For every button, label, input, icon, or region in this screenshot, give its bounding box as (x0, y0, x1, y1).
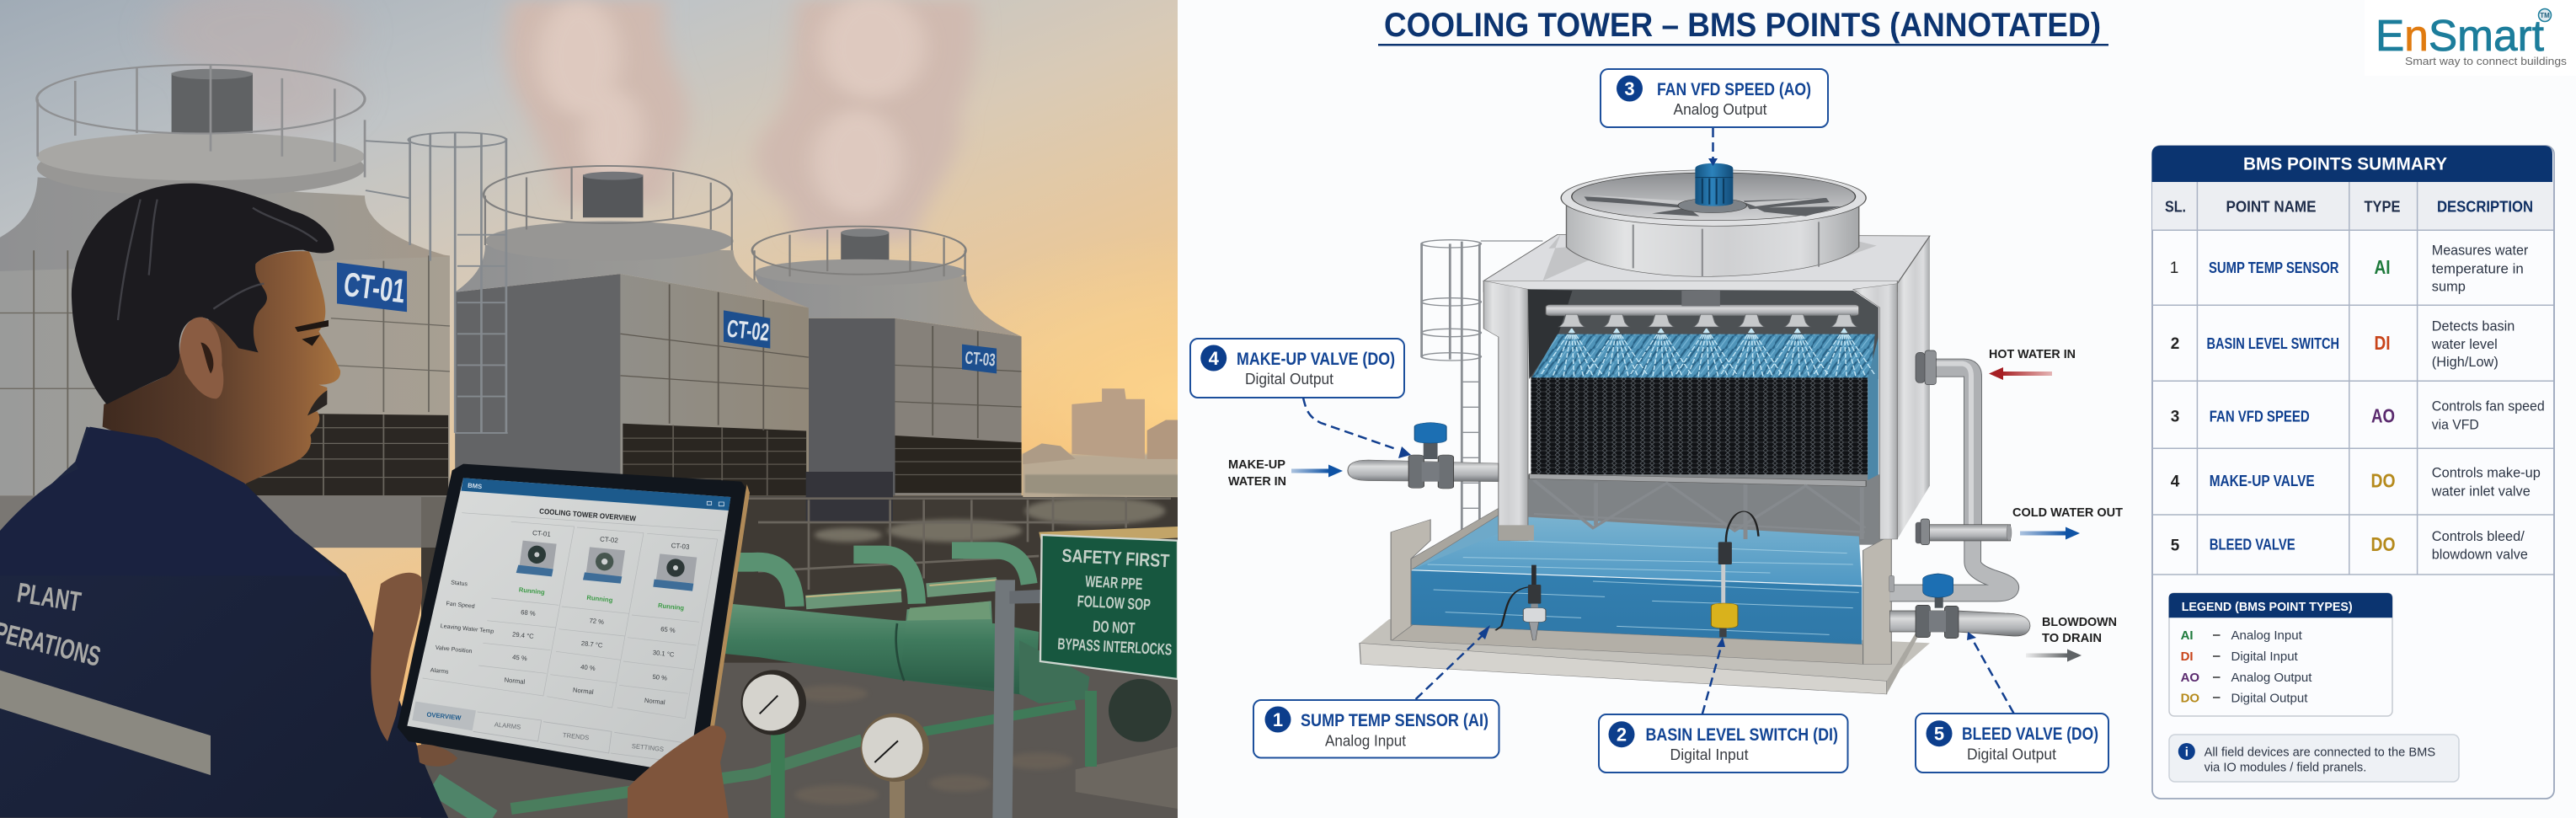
safety sign board (1040, 535, 1178, 679)
legend box: Analog Output (2231, 671, 2312, 685)
table header row: SL. (2165, 197, 2186, 216)
tablet screen content: 30.1 °C (652, 649, 675, 659)
legend box: Digital Input (2231, 650, 2299, 664)
face and neck (103, 251, 340, 484)
callout 3: fan VFD speed: Analog Output (1673, 101, 1767, 118)
tablet screen content (412, 482, 724, 762)
legend box (2169, 593, 2392, 716)
tablet screen content: 28.7 °C (580, 639, 603, 650)
callout 4: make-up valve: 4 (1209, 348, 1220, 369)
water spray header (1541, 291, 1875, 377)
bleed pipe and valve (1889, 574, 2030, 639)
info note (2169, 735, 2459, 782)
callout 1: sump temp sensor: 1 (1273, 709, 1283, 730)
legend box: Digital Output (2231, 691, 2308, 705)
tablet screen content: Alarms (430, 667, 449, 676)
lower return pipe (1889, 541, 2011, 593)
leader: bleed valve (1967, 632, 2013, 714)
table row 5: Controls bleed/ (2432, 529, 2525, 544)
table row 3: FAN VFD SPEED (2210, 409, 2310, 425)
tower sign labels (345, 273, 996, 366)
table row 2: 2 (2171, 335, 2179, 353)
table row 4 (2171, 466, 2541, 499)
panel: cooling tower cutaway diagram (1348, 163, 1930, 694)
table row 1: temperature in (2432, 261, 2524, 276)
tower sign labels: CT-03 (965, 348, 997, 371)
tablet screen content: COOLING TOWER OVERVIEW (539, 507, 637, 523)
legend box: AI (2181, 628, 2194, 643)
info note: i (2185, 745, 2189, 760)
table row 1: SUMP TEMP SENSOR (2209, 259, 2338, 276)
moustache (307, 390, 327, 415)
callout 1: sump temp sensor (1253, 700, 1499, 758)
legend box: AO (2181, 671, 2199, 685)
logo: EnSmart: EnSmart (2376, 12, 2545, 61)
legend box: LEGEND (BMS POINT TYPES) (2182, 601, 2353, 614)
sky (0, 0, 1179, 818)
table row 5: 5 (2171, 537, 2180, 554)
safety sign text (1057, 545, 1173, 660)
hot water pipe (1916, 350, 1973, 525)
logo: EnSmart: TM (2540, 12, 2550, 19)
tower interior (1528, 289, 1879, 379)
callout 5: bleed valve: BLEED VALVE (DO) (1962, 724, 2098, 744)
table row 5: DO (2370, 533, 2396, 555)
cold water out pipe (1916, 519, 2012, 545)
tablet screen content: Status (451, 580, 468, 587)
callout 5: bleed valve: 5 (1934, 724, 1944, 745)
basin base slab (1360, 609, 1930, 694)
table row 1: sump (2432, 280, 2466, 295)
tablet screen content: 65 % (660, 625, 676, 634)
tablet screen content: 40 % (580, 663, 596, 672)
make-up water pipe and valve (1348, 423, 1499, 489)
table row 4: 4 (2171, 473, 2180, 491)
callout 5: bleed valve (1916, 714, 2108, 773)
pressure gauge 2 (861, 714, 929, 818)
cooling tower CT-01 (0, 65, 455, 548)
table row 2 (2171, 318, 2515, 370)
callout 3: fan VFD speed (1601, 69, 1828, 127)
table row 5: blowdown valve (2432, 547, 2528, 562)
callout 3: fan VFD speed: FAN VFD SPEED (AO) (1657, 80, 1811, 99)
distant city skyline (1021, 388, 1178, 497)
sump temperature sensor (1495, 565, 1546, 640)
right hand gripping tablet (628, 725, 729, 818)
tablet screen content: Normal (573, 686, 594, 696)
tablet screen content: Running (586, 594, 613, 604)
basin level switch (1711, 511, 1758, 637)
basin concrete walls (1391, 508, 1891, 664)
fan icons (516, 541, 697, 591)
table row 4: water inlet valve (2431, 484, 2531, 499)
logo: EnSmart (2365, 0, 2576, 76)
tablet screen content: Fan Speed (446, 601, 475, 610)
legend box: DI (2181, 650, 2194, 664)
callout 3: fan VFD speed: 3 (1624, 78, 1635, 99)
callout 2: basin level switch: BASIN LEVEL SWITCH (DI) (1646, 725, 1838, 745)
tablet screen content: CT-01 (532, 529, 552, 538)
tower side face (1897, 236, 1930, 539)
legend box: DO (2181, 691, 2199, 705)
flow label: hot water in: HOT WATER IN (1989, 347, 2076, 361)
title: COOLING TOWER – BMS POINTS (ANNOTATED) (1384, 7, 2101, 44)
tablet screen content: Running (518, 585, 545, 596)
table row 4: Controls make-up (2432, 466, 2541, 481)
flow label: blowdown to drain: BLOWDOWN (2042, 615, 2117, 629)
interior behind water (1528, 474, 1883, 545)
flow label: make-up water in (1228, 457, 1343, 489)
table row 2: DI (2374, 332, 2391, 354)
panel: BMS points summary (2151, 146, 2554, 799)
steam plumes (158, 0, 977, 240)
callout 2: basin level switch: 2 (1617, 724, 1627, 746)
table row 2: (High/Low) (2432, 355, 2499, 370)
tablet screen content: Normal (504, 676, 526, 686)
fill media top (blue) (1531, 334, 1875, 379)
safety sign text: BYPASS INTERLOCKS (1057, 635, 1173, 660)
flow label: make-up water in: MAKE-UP (1228, 457, 1285, 472)
tower sign labels: CT-02 (725, 316, 770, 347)
table row 1 (2170, 243, 2529, 295)
table row 4: MAKE-UP VALVE (2210, 473, 2315, 489)
tablet screen content: OVERVIEW (426, 711, 462, 722)
callout 4: make-up valve (1190, 339, 1404, 398)
panel: rooftop photo scene (0, 0, 1179, 818)
tablet screen content: Leaving Water Temp (440, 623, 494, 635)
cage ladder (1422, 240, 1542, 533)
flow label: blowdown to drain (2026, 615, 2117, 662)
safety sign text: SAFETY FIRST (1061, 545, 1170, 571)
table row 1: AI (2374, 256, 2391, 278)
tablet screen content: 50 % (652, 673, 668, 682)
fan motor (1678, 163, 1746, 213)
left hand behind tablet (371, 573, 422, 741)
lower left fingers (417, 745, 457, 767)
tablet screen content: Normal (644, 697, 665, 706)
table row 5 (2171, 529, 2528, 562)
callout 4: make-up valve: Digital Output (1245, 371, 1333, 388)
summary header (2151, 146, 2552, 182)
summary header: BMS POINTS SUMMARY (2243, 155, 2447, 174)
hair (72, 184, 334, 404)
table row 2: BASIN LEVEL SWITCH (2207, 335, 2339, 352)
callout 1: sump temp sensor: SUMP TEMP SENSOR (AI) (1301, 711, 1488, 730)
hair highlights (118, 200, 318, 320)
flow label: make-up water in: WATER IN (1228, 474, 1286, 489)
cooling tower CT-02 (455, 166, 809, 527)
safety sign text: FOLLOW SOP (1077, 593, 1151, 614)
flow label: cold water out: COLD WATER OUT (2012, 505, 2123, 520)
table header row (2152, 182, 2553, 231)
table row 3: Controls fan speed (2432, 398, 2545, 414)
pressure gauge 1 (741, 670, 806, 818)
leader: sump sensor (1416, 625, 1490, 699)
tablet screen content: TRENDS (562, 731, 590, 741)
tablet screen content: 45 % (512, 653, 527, 662)
tablet with BMS overview screen (398, 464, 750, 782)
table header row: POINT NAME (2226, 197, 2317, 216)
tower front frame (1483, 234, 1930, 541)
basin water (1411, 516, 1862, 644)
ear shadow (200, 343, 213, 373)
tablet screen content: SETTINGS (631, 742, 664, 753)
flow label: hot water in (1989, 347, 2076, 380)
info note: via IO modules / field pranels. (2205, 762, 2366, 775)
shirt collar (0, 426, 295, 534)
table row 4: DO (2370, 470, 2396, 492)
tablet screen content: 68 % (521, 608, 536, 618)
jacket text: PLANT (15, 576, 83, 618)
leader: make-up valve (1303, 398, 1411, 458)
tablet screen content: Valve Position (435, 645, 473, 655)
rooftop background and railing (421, 472, 1179, 818)
table row 2: Detects basin (2432, 318, 2515, 334)
legend box: Analog Input (2231, 628, 2303, 643)
table row 3 (2171, 398, 2545, 432)
honeycomb fill media (1531, 377, 1868, 474)
tower sign labels: CT-01 (342, 266, 407, 310)
callout 2: basin level switch (1599, 714, 1848, 773)
logo: EnSmart: Smart way to connect buildings (2405, 55, 2568, 67)
fan stack (1542, 170, 1877, 281)
jacket text (0, 583, 100, 666)
info note: All field devices are connected to the BMS (2205, 746, 2435, 759)
flow label: blowdown to drain: TO DRAIN (2042, 631, 2102, 645)
callout 1: sump temp sensor: Analog Input (1325, 733, 1406, 750)
callout 2: basin level switch: Digital Input (1670, 746, 1749, 763)
worker head (0, 184, 340, 534)
sign post (992, 580, 1040, 818)
tablet screen content: Running (658, 601, 685, 612)
tablet screen content: BMS (468, 482, 483, 490)
ear (179, 318, 223, 398)
leader: fan motor (1708, 128, 1718, 166)
tablet screen content: CT-02 (600, 535, 619, 544)
table row 5: BLEED VALVE (2210, 537, 2295, 553)
tablet screen content: ALARMS (494, 720, 521, 731)
leader: level switch (1702, 637, 1725, 714)
eyebrow and eye (295, 320, 329, 346)
tablet screen content: CT-03 (671, 542, 690, 551)
table row 3: AO (2371, 404, 2395, 426)
tablet screen content: 29.4 °C (512, 630, 535, 640)
lower worker jacket (0, 427, 448, 818)
table row 3: 3 (2171, 409, 2179, 426)
table row 1: 1 (2170, 259, 2178, 277)
table header row: TYPE (2364, 197, 2401, 216)
table row 2: water level (2431, 337, 2498, 352)
safety sign text: WEAR PPE (1085, 573, 1143, 594)
table row 3: via VFD (2432, 417, 2479, 432)
rooftop foreground: pipes, gauges and sign (421, 472, 1179, 818)
cooling tower CT-03 (752, 227, 1023, 524)
table row 1: Measures water (2432, 243, 2529, 259)
green pipes (646, 550, 1029, 607)
support beam and trusses (1529, 474, 1866, 539)
tablet screen content: 72 % (589, 617, 605, 626)
table header row: DESCRIPTION (2437, 197, 2533, 216)
callout 5: bleed valve: Digital Output (1967, 746, 2056, 763)
flow label: cold water out (2012, 505, 2123, 539)
safety sign text: DO NOT (1093, 618, 1136, 638)
caged access ladder (366, 132, 508, 433)
callout 4: make-up valve: MAKE-UP VALVE (DO) (1237, 350, 1395, 369)
piping on right side of tower (1889, 350, 2030, 639)
